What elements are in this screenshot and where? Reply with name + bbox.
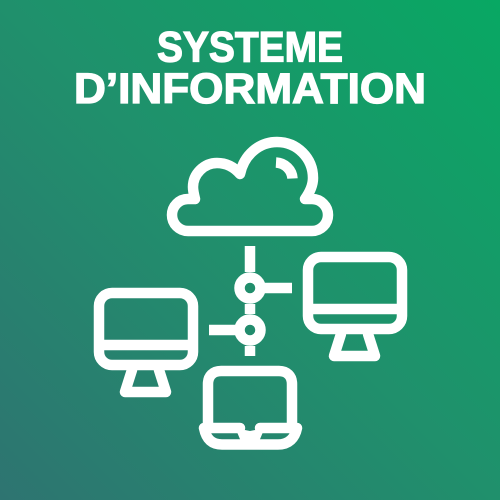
icon: left monitor	[99, 293, 193, 392]
icon: cloud	[172, 142, 328, 231]
network illustration	[99, 142, 402, 444]
network connector	[209, 246, 292, 356]
title: D’INFORMATION	[74, 65, 426, 113]
title: SYSTEME	[157, 24, 343, 72]
icon: laptop	[204, 371, 297, 444]
cloud highlight	[276, 162, 292, 178]
title	[74, 24, 426, 113]
icon: right monitor	[308, 257, 402, 356]
